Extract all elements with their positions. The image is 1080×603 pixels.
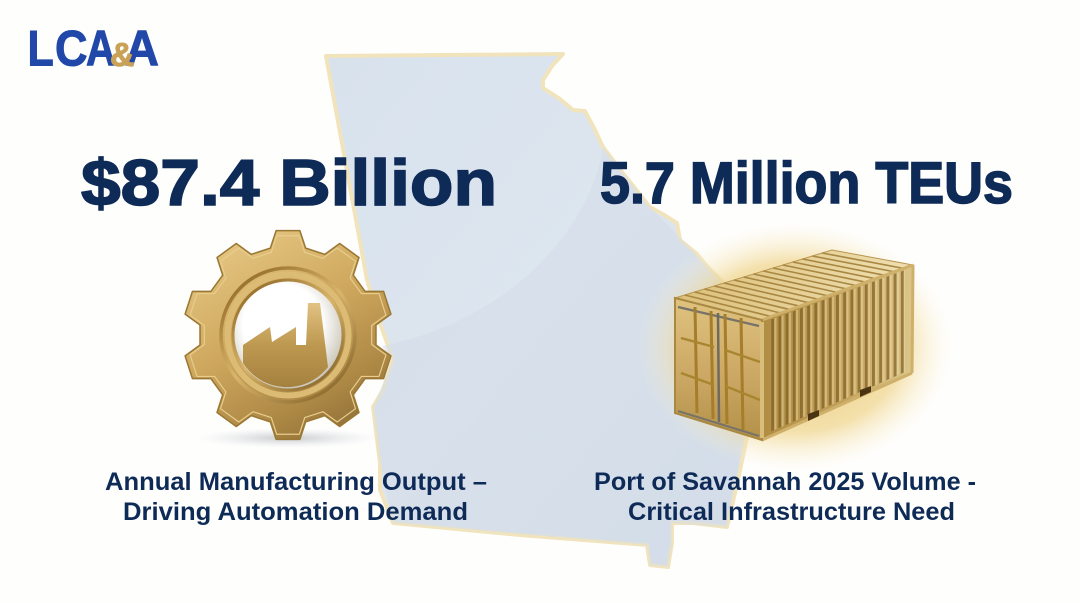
map of Georgia — [326, 54, 760, 567]
logo — [28, 20, 159, 77]
icon: gold gear with factory — [185, 231, 391, 448]
logo: C — [55, 21, 87, 77]
caption: port: Critical Infrastructure Need — [628, 498, 955, 526]
factory silhouette — [243, 303, 328, 387]
caption: port: Port of Savannah 2025 Volume - — [594, 468, 976, 496]
caption: manufacturing — [105, 468, 487, 526]
caption: manufacturing: Driving Automation Demand — [123, 498, 468, 526]
logo: A — [86, 21, 116, 76]
container doors — [675, 298, 762, 440]
container side — [762, 265, 913, 440]
caption: port — [594, 468, 976, 526]
map lower shaded swoosh — [373, 147, 760, 567]
heading: port volume value: 5.7 Million TEUs — [600, 151, 1013, 216]
icon: gold shipping container — [675, 250, 913, 440]
heading: manufacturing output value: $87.4 Billion — [81, 146, 497, 219]
logo: & — [110, 37, 134, 74]
container top — [675, 250, 913, 320]
logo: A — [125, 21, 159, 77]
logo: L — [28, 20, 54, 76]
container glow — [637, 222, 953, 472]
caption: manufacturing: Annual Manufacturing Output – — [105, 468, 487, 496]
